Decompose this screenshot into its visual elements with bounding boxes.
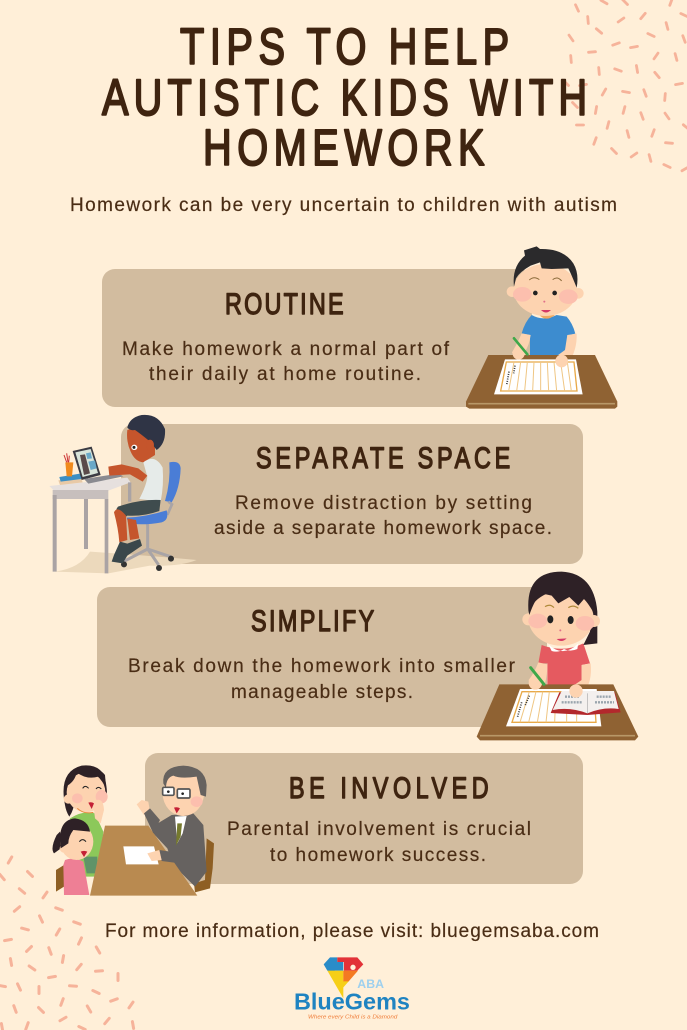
icon: girl writing with book bbox=[477, 572, 638, 740]
logo: BlueGems ABA bbox=[294, 957, 410, 1020]
panel: simplify bbox=[97, 587, 547, 727]
text: routine body bbox=[122, 339, 450, 385]
heading: routine: ROUTINE bbox=[225, 287, 344, 321]
text: separate space body: aside a separate homework space. bbox=[214, 518, 552, 539]
subtitle: Homework can be very uncertain to children with autism bbox=[70, 195, 617, 216]
decoration: bottom left dashes bbox=[0, 857, 134, 1030]
heading: separate space: SEPARATE SPACE bbox=[256, 441, 510, 475]
icon: boy at laptop bbox=[49, 415, 197, 573]
logo: BlueGems ABA: Where every Child is a Diamond bbox=[308, 1014, 399, 1020]
heading: be involved: BE INVOLVED bbox=[289, 771, 489, 805]
text: separate space body bbox=[214, 493, 552, 539]
logo: BlueGems ABA: BlueGems bbox=[294, 989, 410, 1015]
panel: separate space bbox=[121, 424, 583, 564]
text: be involved body: to homework success. bbox=[270, 845, 486, 866]
text: be involved body: Parental involvement is crucial bbox=[227, 819, 531, 840]
title: TIPS TO HELP bbox=[180, 18, 509, 75]
text: simplify body: manageable steps. bbox=[231, 682, 413, 703]
panel: be involved bbox=[145, 753, 583, 884]
icon: puzzle diamond bbox=[324, 957, 363, 998]
title bbox=[102, 18, 587, 176]
title: AUTISTIC KIDS WITH bbox=[102, 69, 587, 126]
text: be involved body bbox=[227, 819, 531, 866]
footer text: For more information, please visit: bluegemsaba.com bbox=[105, 921, 599, 942]
text: routine body: their daily at home routine. bbox=[149, 364, 421, 385]
logo: BlueGems ABA: ABA bbox=[357, 977, 384, 991]
decoration: top right dashes bbox=[564, 0, 687, 171]
text: simplify body bbox=[128, 656, 516, 703]
text: separate space body: Remove distraction by setting bbox=[235, 493, 532, 514]
icon: parents and teacher at table bbox=[52, 765, 214, 896]
panel: routine bbox=[102, 269, 532, 407]
text: simplify body: Break down the homework into smaller bbox=[128, 656, 516, 677]
title: HOMEWORK bbox=[203, 119, 485, 176]
text: routine body: Make homework a normal part of bbox=[122, 339, 450, 360]
icon: boy writing at desk bbox=[466, 246, 617, 409]
heading: simplify: SIMPLIFY bbox=[251, 604, 374, 638]
